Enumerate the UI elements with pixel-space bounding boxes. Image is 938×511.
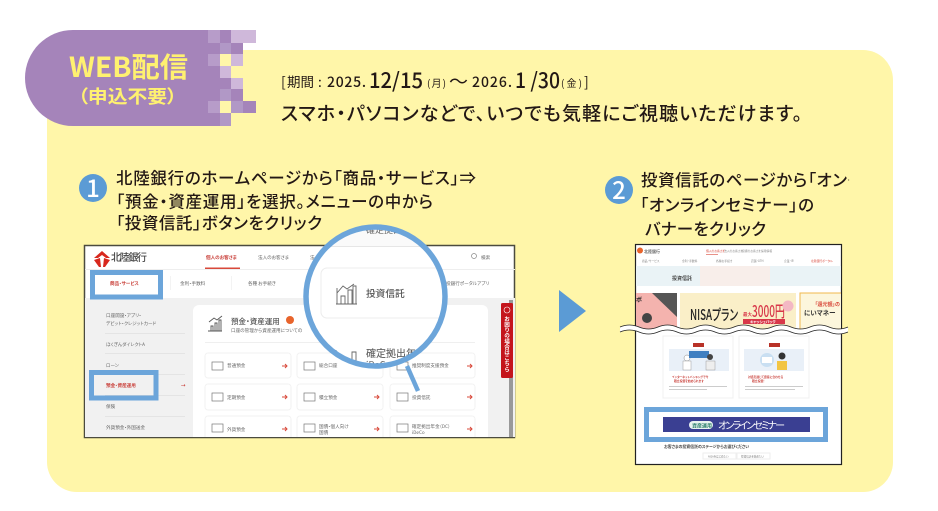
text: period: 1 /30 xyxy=(515,65,560,95)
scrollbar xyxy=(509,300,513,438)
page header: 店舗・ATM xyxy=(751,259,763,263)
page header: 北陸銀行ポータル xyxy=(811,259,833,263)
badge subtitle: （申込不要） xyxy=(78,83,177,109)
main nav: 商品・サービス xyxy=(110,280,139,287)
product cards: 国債・個人向け xyxy=(319,423,349,430)
page header: 企業・IR xyxy=(784,259,794,263)
page header xyxy=(637,248,833,263)
selection prompt: NISAをはじめたい xyxy=(708,454,729,458)
banner: pink xyxy=(636,293,677,329)
side menu: 預金・資産運用 xyxy=(106,382,136,389)
side menu: 外貨預金・外国送金 xyxy=(106,424,145,431)
highlight: seminar banner xyxy=(646,410,826,440)
magnifier: 投資信託 xyxy=(366,286,405,300)
top nav: 法人のお客さま xyxy=(258,254,289,261)
page header: 採用情報 xyxy=(761,249,772,253)
product cards: 普通預金 xyxy=(227,362,246,369)
step 1 heading: 北陸銀行のホームページから「商品・サービス」⇒ xyxy=(116,165,476,189)
side tab: お困りの場合はこちら xyxy=(503,316,511,373)
step 2 heading xyxy=(640,167,850,240)
text: period: 期間 xyxy=(287,71,314,91)
page header: 金利・手数料 xyxy=(682,259,698,263)
banner: pink: ボ xyxy=(636,295,642,304)
text: period: 2025. xyxy=(327,72,366,92)
main nav: 金利・手数料 xyxy=(180,280,206,287)
text: period: (月) xyxy=(427,75,446,90)
highlight: 商品・サービス xyxy=(92,272,160,297)
seminar banner: 資産運用 xyxy=(692,422,712,430)
seminar banner xyxy=(663,417,810,432)
product cards: 積立預金 xyxy=(319,394,338,401)
top nav xyxy=(205,254,491,269)
side tab xyxy=(501,303,513,378)
magnifier: 確定拠出年金 xyxy=(366,345,426,360)
main nav: 各種 お手続き xyxy=(248,280,276,287)
magnifier xyxy=(300,220,451,391)
step 1 heading xyxy=(116,165,476,234)
top nav: 個人のお客さま xyxy=(206,254,238,261)
text: period xyxy=(281,65,589,95)
side menu: デビット・クレジットカード xyxy=(106,320,156,327)
banner: NISA: 最大 xyxy=(743,311,752,318)
step 2 number: 2 xyxy=(612,171,626,206)
banner: NISA xyxy=(680,293,796,329)
banner: money: にいマネー xyxy=(804,307,835,317)
page header: 投資のお客さま xyxy=(742,249,761,253)
logo xyxy=(94,251,147,267)
seminar cards: 対話を通じて資産に合わせる xyxy=(748,375,783,379)
product cards: 投資信託 xyxy=(412,394,431,401)
step 1 heading: 「預金・資産運用」を選択。メニューの中から xyxy=(116,188,433,212)
wave lines xyxy=(620,325,848,334)
product cards: 定期預金 xyxy=(227,394,246,401)
selection prompt: お客さまの投資信託のステージからお選びください xyxy=(664,444,749,450)
product cards: 総合口座 xyxy=(319,362,338,369)
main nav: 投銀行ポータルアプリ xyxy=(446,280,489,287)
product cards: 国債 xyxy=(319,429,329,436)
text: period: ～ xyxy=(449,68,468,94)
product cards: 確定拠出年金（DC） xyxy=(412,423,450,430)
text: period: 12/15 xyxy=(369,65,423,95)
highlight: 預金・資産運用 xyxy=(92,372,156,398)
magnifier: iDeCo xyxy=(366,358,391,371)
step 2 heading: · xyxy=(847,175,850,184)
text: period: [ xyxy=(281,72,286,92)
side menu: → xyxy=(181,383,186,389)
page title band xyxy=(636,266,841,286)
text: description: スマホ・パソコンなどで、いつでも気軽にご視聴いただけます。 xyxy=(281,99,802,126)
selection prompt xyxy=(664,444,770,459)
banner: money xyxy=(800,293,842,329)
seminar cards: 積立投資を始められます xyxy=(674,379,704,383)
side menu xyxy=(105,312,186,431)
banner: NISA: キャッシュバック xyxy=(750,319,776,325)
product cards xyxy=(205,353,475,444)
product cards: 外貨預金 xyxy=(227,426,246,433)
step 2 heading: バナーをクリック xyxy=(644,216,766,240)
text: period: (金) xyxy=(561,75,582,90)
banner: NISA: NISAプラン xyxy=(690,304,738,325)
step 1 number: 1 xyxy=(86,169,100,204)
page header: 個人のお客さま xyxy=(706,249,725,253)
page title band: 投資信託 xyxy=(672,275,692,282)
banner: NISA: 3000円 xyxy=(752,298,785,322)
top nav: 検索 xyxy=(481,254,491,261)
content panel: 口座の管理から資産運用についての xyxy=(231,327,303,334)
banner: money: 「還元額」の xyxy=(815,301,840,308)
side menu: 保険 xyxy=(106,403,116,410)
step 2 heading: 「オンラインセミナー」の xyxy=(640,192,814,216)
wave break xyxy=(620,325,848,334)
seminar cards: 積立投資！ xyxy=(752,379,765,383)
seminar banner: オンラインセミナー xyxy=(718,417,785,432)
step 2 heading: 投資信託のページから「オン xyxy=(641,167,847,191)
content panel: 預金・資産運用 xyxy=(231,316,280,327)
main nav xyxy=(110,276,489,290)
text: period: : xyxy=(318,71,322,91)
badge: WEB配信 xyxy=(25,30,256,126)
screenshot: investment trust page xyxy=(636,244,842,464)
magnifier: 確定拠出 xyxy=(366,223,402,236)
content panel xyxy=(193,305,488,445)
arrow xyxy=(559,290,586,332)
product cards: 推奨制度支援預金 xyxy=(412,362,449,369)
text: period: ] xyxy=(584,72,589,92)
side menu: ほくぎんダイレクトA xyxy=(106,341,145,348)
selection prompt: 投資信託を始めたい xyxy=(741,454,764,458)
product cards: iDeCo xyxy=(412,429,425,436)
badge title: WEB配信 xyxy=(69,46,188,86)
side menu: ローン xyxy=(106,363,120,369)
page header: 法人のお客さま xyxy=(724,249,743,253)
text: period: 2026. xyxy=(472,72,512,92)
top nav: 法 xyxy=(310,254,315,261)
seminar cards xyxy=(663,336,809,398)
page header: 各種お手続き xyxy=(716,259,733,263)
step 1 number xyxy=(79,169,107,204)
page header: 北陸銀行 xyxy=(644,248,660,255)
screenshot: bank website menu xyxy=(84,246,515,445)
side menu: 口座開設・アプリ・ xyxy=(106,312,141,319)
seminar cards: インターネットバンキングで今 xyxy=(672,375,708,379)
panel: yellow background xyxy=(47,50,893,492)
step 2 number xyxy=(605,171,633,206)
page header: 商品・サービス xyxy=(642,259,660,263)
step 1 heading: 「投資信託」ボタンをクリック xyxy=(116,210,322,234)
logo: 北陸銀行 xyxy=(111,249,147,264)
